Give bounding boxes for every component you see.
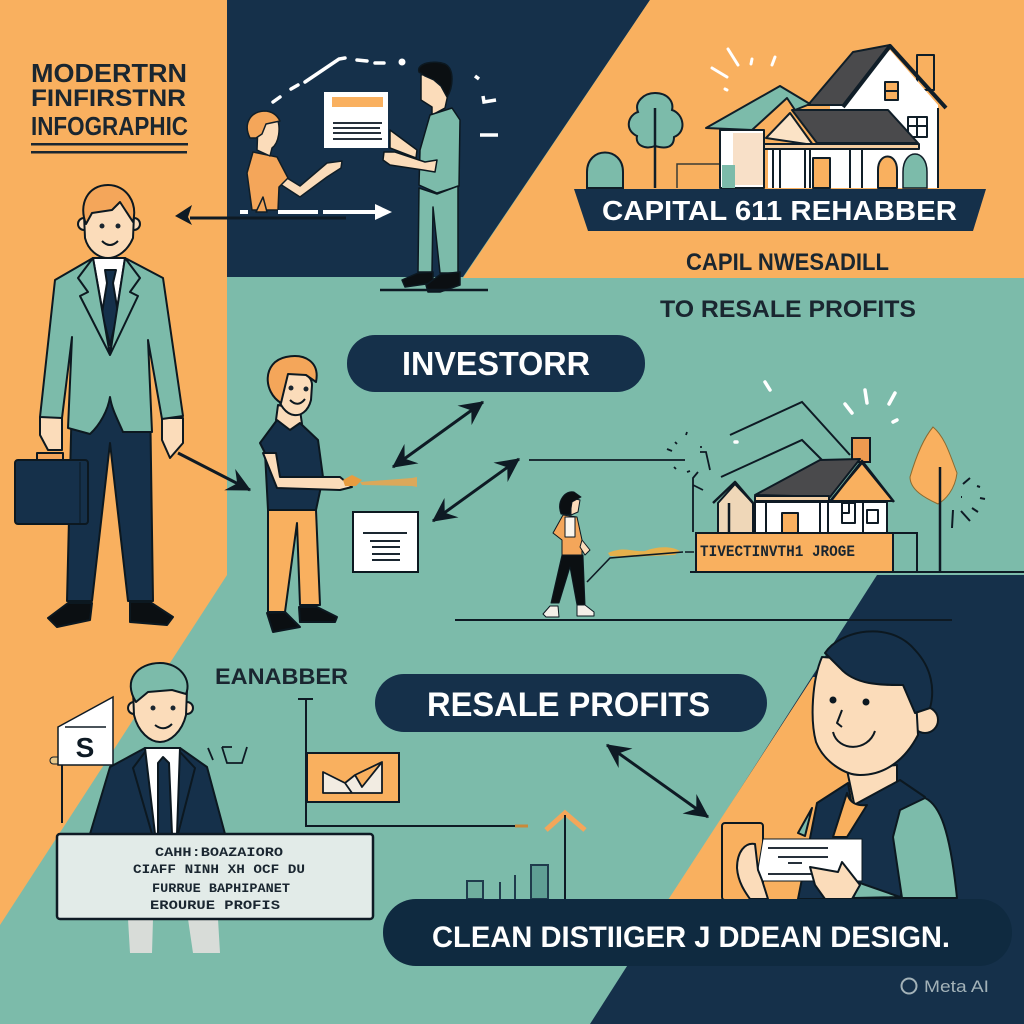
shirt [93, 258, 125, 353]
person: walking woman [543, 492, 594, 617]
person: businessman with briefcase [15, 185, 183, 627]
orange tool held by investor [343, 475, 417, 487]
flag with dollar sign [50, 697, 113, 823]
title: INFOGRAPHIC [31, 111, 188, 141]
dashed path end dot [398, 58, 406, 66]
pill: clean design [383, 899, 1012, 966]
ground line [380, 289, 488, 291]
flag with dollar sign: S [76, 732, 94, 763]
person: man in dark suit [90, 663, 225, 834]
document icon [353, 512, 418, 572]
text: capital subheading: TO RESALE PROFITS [660, 296, 916, 323]
info card: CIAFF NINH XH OCF DU [133, 862, 305, 877]
orange box with envelope [307, 753, 399, 802]
ground line: house [690, 571, 1024, 573]
hands [40, 417, 183, 458]
person: kid [247, 111, 342, 212]
sun rays [712, 49, 775, 90]
orange shirt [833, 793, 867, 837]
tree [629, 93, 682, 188]
pill: resale profits [375, 674, 767, 732]
right hand [810, 862, 860, 899]
tie [102, 270, 118, 345]
connector line to house [529, 459, 685, 461]
banner [574, 189, 986, 231]
sleeves [893, 798, 957, 898]
vest [798, 780, 925, 899]
briefcase [15, 453, 88, 524]
growth arrow [515, 813, 585, 899]
info card [57, 834, 373, 919]
sign: TIVECTINVTH1 JROGE [700, 543, 855, 561]
head and hair [78, 185, 140, 258]
watermark: meta ai [902, 977, 989, 996]
arrow: businessman to investor [178, 453, 250, 490]
ticks beside man [208, 747, 247, 763]
bars [467, 865, 548, 899]
info card: FURRUE BAPHIPANET [152, 881, 290, 896]
white accent marks [475, 76, 498, 135]
person: worker in teal [383, 62, 460, 292]
trousers [67, 395, 153, 601]
front porch [764, 110, 919, 188]
double arrow: upper [393, 402, 483, 467]
lapels [78, 258, 140, 355]
ear [912, 707, 938, 733]
chimney [852, 438, 870, 462]
white card [756, 839, 862, 881]
shoes [48, 602, 173, 627]
face [813, 657, 918, 775]
scene: house with orange sign [667, 382, 985, 572]
person: smiling man with card [722, 631, 957, 900]
watermark: meta ai: Meta AI [924, 977, 989, 996]
roof outline lines [721, 402, 850, 477]
pill: investor [347, 335, 645, 392]
label: eanabber: EANABBER [215, 664, 348, 689]
left hand [737, 844, 768, 899]
pill: investor: INVESTORR [402, 345, 590, 382]
fence [677, 164, 720, 188]
document held up [324, 92, 388, 148]
arrow: white right [240, 204, 392, 220]
pill: resale profits: RESALE PROFITS [427, 686, 710, 724]
large white house [808, 45, 946, 188]
sparks [667, 432, 710, 532]
scene: kid and worker exchanging a document [175, 58, 498, 292]
scene: main house with banner [574, 45, 986, 231]
orange phone [722, 823, 763, 900]
fence box [893, 533, 917, 572]
info card: CAHH:BOAZAIORO [155, 845, 283, 860]
double arrow: resale [607, 745, 708, 817]
grey legs [128, 919, 220, 953]
ground line: middle [455, 619, 952, 621]
title: FINFIRSTNR [31, 85, 186, 112]
eyes and mouth [830, 696, 875, 747]
neck [847, 765, 897, 808]
hair [825, 631, 932, 713]
left bush [587, 152, 623, 188]
arrow: black left [175, 205, 346, 225]
chart with axis and orange box [298, 699, 585, 899]
dashed path [273, 58, 384, 102]
banner: CAPITAL 611 REHABBER [602, 195, 957, 226]
double arrow: lower [433, 459, 519, 521]
title: MODERTRN [31, 58, 187, 88]
autumn tree [910, 427, 985, 572]
text: capital subheading [660, 249, 916, 323]
text: capital subheading: CAPIL NWESADILL [686, 249, 889, 276]
pill: clean design: CLEAN DISTIIGER J DDEAN DESIGN. [432, 921, 950, 954]
house body [713, 459, 894, 533]
right bush [903, 154, 927, 188]
person: investor in orange trousers [260, 356, 352, 632]
golden trail [587, 547, 694, 582]
jacket [40, 258, 183, 434]
title [31, 58, 188, 154]
white rays [735, 382, 897, 442]
sign [696, 533, 893, 572]
info card: EROURUE PROFIS [150, 898, 280, 913]
left wing with teal roof [706, 86, 810, 188]
